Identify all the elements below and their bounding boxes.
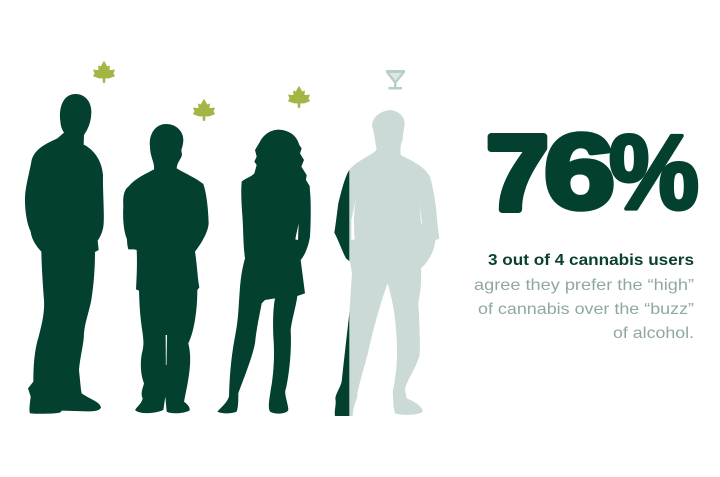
statistic: 76%: 6 bbox=[544, 113, 615, 231]
person 4 silhouette, partly filled bbox=[334, 110, 439, 416]
icon: cocktail glass bbox=[386, 70, 405, 90]
description text: agree they prefer the “high” bbox=[474, 277, 694, 294]
statistic: 76% bbox=[486, 113, 699, 232]
statistic: 76%: % bbox=[609, 114, 699, 232]
person 1 silhouette bbox=[25, 94, 104, 414]
statistic: 76%: 7 bbox=[486, 114, 548, 232]
description text: 3 out of 4 cannabis users bbox=[488, 252, 694, 269]
description text bbox=[474, 252, 694, 342]
person 2 silhouette bbox=[123, 124, 209, 413]
person 3 silhouette bbox=[217, 130, 311, 414]
description text: of alcohol. bbox=[613, 325, 694, 342]
infographic bbox=[24, 61, 698, 416]
icon: cannabis leaf 2 bbox=[194, 100, 214, 120]
description text: of cannabis over the “buzz” bbox=[478, 301, 694, 318]
icon: cannabis leaf 3 bbox=[288, 86, 310, 108]
icon: cannabis leaf 1 bbox=[94, 62, 114, 82]
